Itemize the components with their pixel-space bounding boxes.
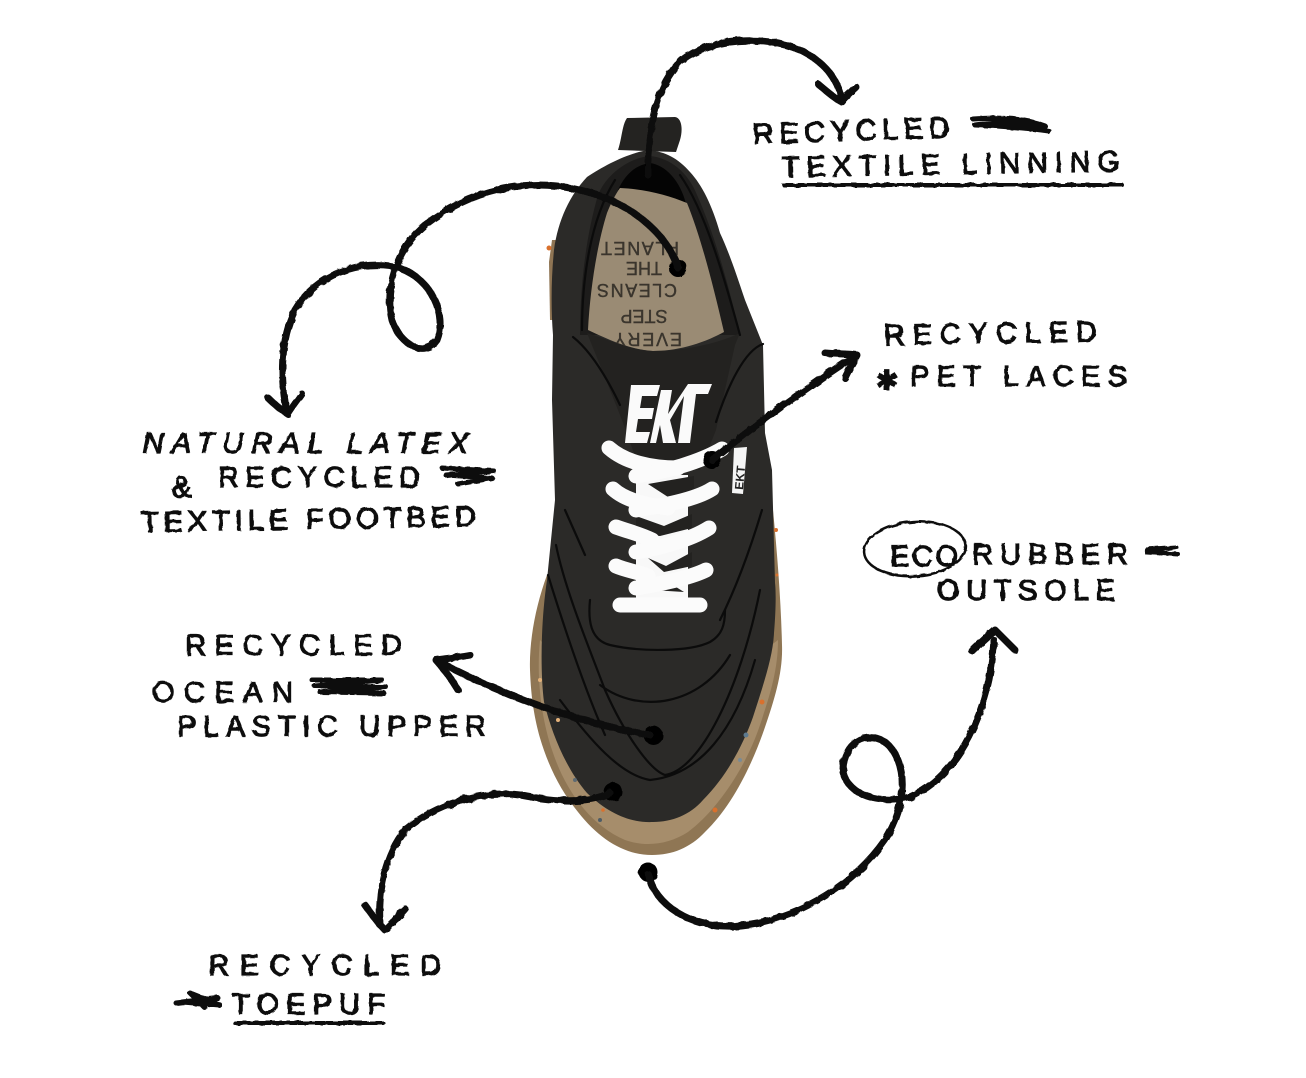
label: recycled pet laces — [875, 316, 1127, 397]
label: eco rubber outsole: RUBBER — [972, 539, 1128, 571]
footbed printed text: THE — [626, 258, 662, 278]
label: recycled toe puff — [176, 950, 441, 1023]
tongue — [587, 333, 740, 470]
label: natural latex and recycled textile footbed: NATURAL LATEX — [143, 428, 470, 460]
upper — [542, 150, 776, 822]
laces — [609, 448, 722, 605]
label: recycled pet laces: PET LACES — [910, 361, 1127, 393]
arrow: pet laces — [703, 353, 857, 469]
shoe — [530, 117, 782, 855]
sole speckles — [538, 246, 778, 822]
label: recycled ocean plastic upper: RECYCLED — [185, 630, 402, 662]
collar opening — [618, 163, 686, 204]
label: recycled toe puff: RECYCLED — [208, 950, 441, 982]
label: recycled textile lining — [752, 112, 1122, 185]
arrow: toe puff — [365, 782, 622, 930]
outsole inner band — [539, 640, 778, 844]
label: recycled ocean plastic upper: PLASTIC UPPER — [177, 711, 486, 743]
label: natural latex and recycled textile footbed: RECYCLED — [218, 462, 420, 494]
side label: EKT — [732, 464, 748, 490]
label: eco rubber outsole: OUTSOLE — [937, 575, 1115, 607]
footbed printed text: STEP — [620, 306, 668, 326]
label: recycled pet laces: ✱ — [875, 364, 898, 397]
heel sole edge — [549, 240, 558, 320]
footbed — [588, 188, 724, 351]
outsole — [530, 440, 782, 855]
label: recycled ocean plastic upper — [152, 630, 486, 743]
label: recycled toe puff: TOEPUF — [232, 989, 385, 1021]
arrow: ocean plastic upper — [436, 655, 662, 744]
footbed printed text: CLEANS — [597, 280, 677, 300]
collar lining — [580, 156, 740, 335]
label: eco rubber outsole: ECO — [890, 541, 958, 573]
arrow: textile lining — [648, 41, 856, 175]
footbed printed text: PLANET — [601, 238, 679, 258]
label: recycled textile lining: TEXTILE LINNING — [782, 146, 1120, 184]
pull tab — [618, 117, 682, 152]
label: recycled pet laces: RECYCLED — [884, 316, 1097, 352]
label: recycled textile lining: RECYCLED — [752, 112, 950, 151]
side label — [732, 447, 748, 494]
EKT logo — [625, 384, 712, 443]
footbed printed text — [597, 238, 682, 349]
footbed printed text: EVERY — [614, 329, 682, 349]
label: eco rubber outsole — [862, 519, 1178, 607]
arrow: eco rubber outsole — [638, 630, 1015, 926]
label: recycled ocean plastic upper: OCEAN — [152, 677, 293, 709]
arrow: footbed — [268, 185, 687, 414]
shoe seams — [548, 175, 763, 780]
label: natural latex and recycled textile footbed: TEXTILE FOOTBED — [141, 501, 476, 539]
label: natural latex and recycled textile footbed: & — [172, 472, 191, 504]
label: natural latex and recycled textile footbed — [141, 428, 494, 539]
